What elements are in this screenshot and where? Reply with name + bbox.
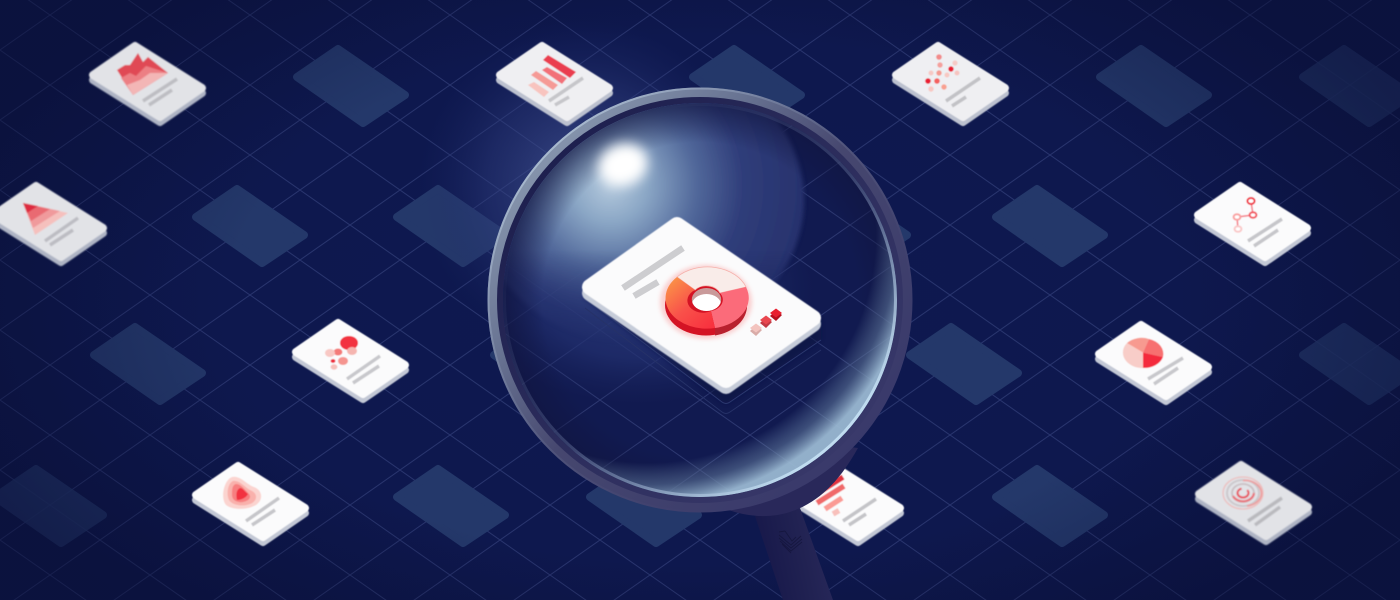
- card: bar chart top: [500, 46, 609, 122]
- card: radial rings: [1199, 465, 1308, 541]
- handle collar: [712, 440, 858, 516]
- donut chart: [660, 265, 752, 339]
- glow behind lens: [420, 20, 750, 350]
- card: scatter plot: [896, 46, 1005, 122]
- card: horizontal bar chart partly behind lens: [791, 466, 900, 542]
- magnifying glass: [488, 88, 912, 600]
- card: heat map: [196, 466, 305, 542]
- legend squares: [750, 308, 782, 336]
- lens hotspot: [592, 137, 654, 193]
- card: pie chart: [1099, 325, 1208, 401]
- card: network graph: [1198, 186, 1307, 262]
- card: bubble chart: [296, 323, 405, 399]
- lens: [503, 103, 897, 497]
- handle: [755, 508, 833, 600]
- metal ring: [488, 88, 912, 512]
- card body: [590, 225, 813, 386]
- lens inner rim: [504, 104, 896, 496]
- icon: handle logo: [779, 531, 802, 553]
- card: triangle chart: [0, 186, 103, 262]
- text bars: [623, 248, 683, 296]
- main card under the lens: [583, 225, 821, 414]
- card: area chart: [93, 46, 202, 122]
- card shadow plates: [583, 225, 821, 414]
